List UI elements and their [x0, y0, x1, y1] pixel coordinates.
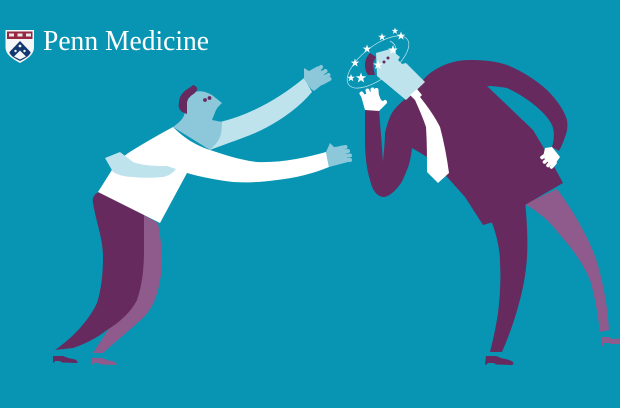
head: [376, 49, 425, 100]
eyes: [203, 98, 207, 102]
tie: [410, 89, 449, 183]
stars: [347, 28, 405, 82]
wordmark: Penn Medicine: [43, 26, 209, 57]
logo: Penn Medicine: [6, 26, 209, 63]
right shoe: [602, 337, 620, 346]
front hand: [326, 143, 350, 167]
front leg: [483, 200, 527, 352]
folded sleeve: [105, 152, 176, 178]
hand on hip: [542, 147, 560, 167]
icon: Penn shield: [6, 30, 34, 63]
jacket and arms: [365, 60, 567, 225]
back leg: [525, 189, 609, 332]
white shirt and front arm: [98, 127, 329, 223]
front leg: [55, 192, 144, 350]
eyes: [382, 60, 386, 64]
left shoe: [485, 356, 513, 365]
figure: left man: [53, 66, 350, 365]
dizzy ring: [339, 27, 417, 97]
back leg: [93, 215, 162, 353]
hair: [365, 53, 376, 75]
left shoe: [53, 356, 78, 363]
head and neck: [173, 91, 222, 150]
raised hand: [361, 90, 387, 111]
back hand: [304, 66, 330, 91]
right shoe: [92, 358, 117, 365]
figure: right man: [339, 27, 620, 365]
back arm: [210, 78, 312, 150]
hair: [179, 85, 197, 114]
